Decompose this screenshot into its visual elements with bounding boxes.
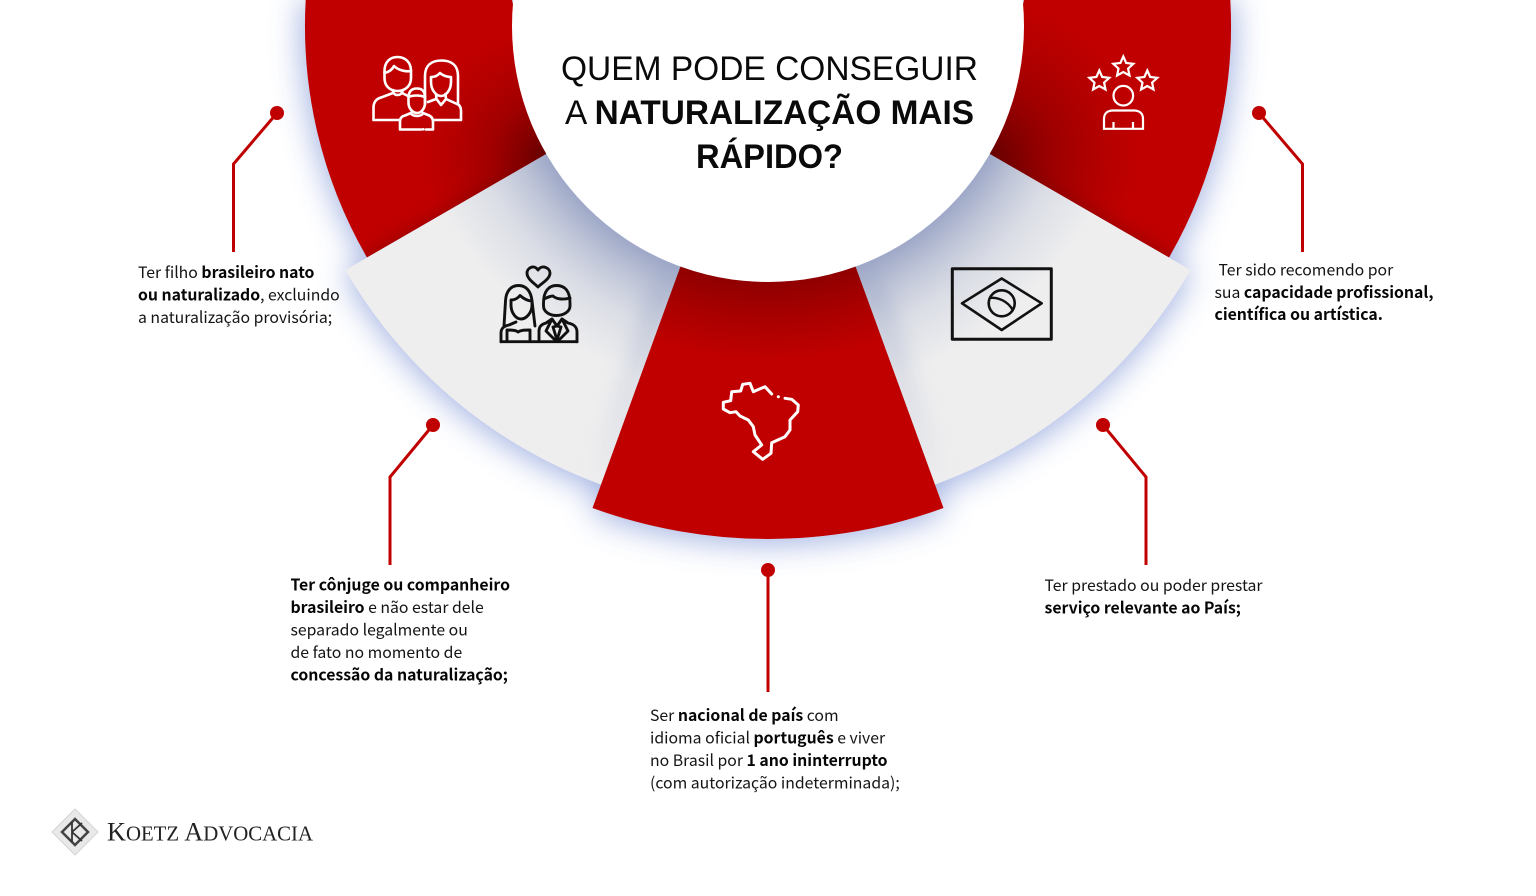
panel: left grey wedge bbox=[345, 154, 684, 490]
leader line: top left bbox=[234, 106, 284, 252]
leader line: top right bbox=[1252, 106, 1302, 252]
text block: filho brasileiro bbox=[138, 260, 340, 328]
logo: Koetz Advocacia: KOETZ ADVOCACIA bbox=[107, 816, 314, 846]
panel: central white circle bbox=[512, 0, 1024, 282]
icon: Brazilian flag bbox=[952, 269, 1051, 339]
panel: bottom red segment bbox=[592, 267, 944, 539]
leader line: center bbox=[761, 563, 775, 692]
title bbox=[561, 50, 978, 176]
panel: right grey wedge bbox=[852, 154, 1191, 490]
text block: filho brasileiro: ou naturalizado, excluindo bbox=[138, 282, 340, 305]
leader line: lower right bbox=[1096, 418, 1146, 565]
text block: filho brasileiro: Ter filho brasileiro nato bbox=[138, 260, 315, 283]
icon: family bbox=[374, 57, 461, 130]
text block: filho brasileiro: a naturalização provisória; bbox=[138, 305, 332, 328]
panel: top-right red segment bbox=[984, 0, 1231, 268]
text block: nacional de país: Ser nacional de país com bbox=[650, 703, 839, 726]
text block: capacidade profissional bbox=[1214, 258, 1434, 325]
text block: cônjuge: Ter cônjuge ou companheiro bbox=[290, 572, 510, 596]
text block: serviço relevante bbox=[1044, 573, 1263, 618]
text block: cônjuge: de fato no momento de bbox=[290, 640, 462, 663]
outer blue shadow of the ring bbox=[302, 0, 1234, 543]
title: QUEM PODE CONSEGUIR bbox=[561, 50, 978, 88]
text block: nacional de país: (com autorização indeterminada); bbox=[650, 770, 900, 794]
text block: serviço relevante: Ter prestado ou poder prestar bbox=[1044, 573, 1263, 596]
text block: cônjuge: separado legalmente ou bbox=[290, 618, 468, 640]
icon: stars above a person bbox=[1089, 56, 1157, 129]
text block: cônjuge: brasileiro e não estar dele bbox=[290, 595, 484, 618]
text block: capacidade profissional: sua capacidade profissional, bbox=[1214, 280, 1434, 303]
leader line: lower left bbox=[390, 418, 440, 565]
title: RÁPIDO? bbox=[696, 138, 843, 176]
icon: couple with heart bbox=[501, 267, 577, 342]
text block: nacional de país: no Brasil por 1 ano ininterrupto bbox=[650, 748, 888, 771]
logo: Koetz Advocacia bbox=[52, 809, 314, 855]
text block: nacional de país: idioma oficial português e viver bbox=[650, 726, 886, 748]
panel: top-left red segment bbox=[305, 0, 552, 268]
text block: nacional de país bbox=[650, 703, 900, 794]
icon: map of Brazil bbox=[723, 383, 798, 459]
title: A NATURALIZAÇÃO MAIS bbox=[565, 94, 974, 132]
text block: serviço relevante: serviço relevante ao País; bbox=[1044, 596, 1241, 618]
text block: capacidade profissional: Ter sido recomendo por bbox=[1218, 258, 1394, 280]
text block: cônjuge bbox=[290, 572, 510, 686]
text block: capacidade profissional: científica ou artística. bbox=[1214, 302, 1383, 325]
text block: cônjuge: concessão da naturalização; bbox=[290, 662, 508, 686]
